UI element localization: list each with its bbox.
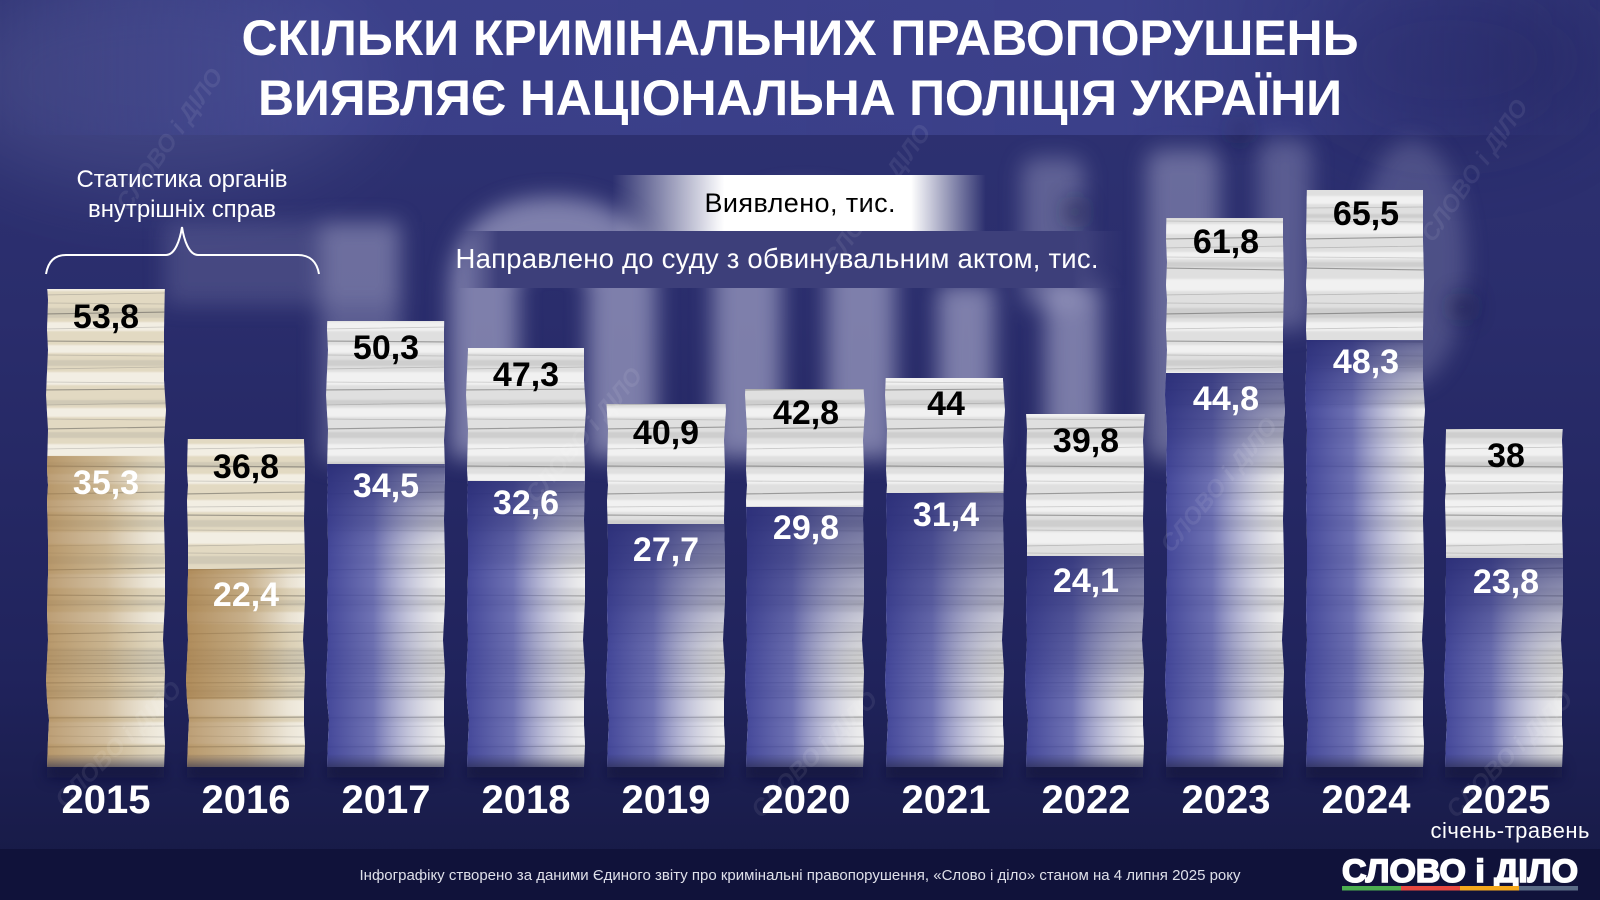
annotation: statistics of internal affairs bodies: внутрішніх справ <box>88 196 276 223</box>
bar: 2024: 48,3 <box>1333 343 1399 381</box>
bar: 2017 <box>326 321 446 814</box>
watermarks: СЛОВО і ДІЛО <box>819 119 937 272</box>
bar: 2017: 2017 <box>342 778 430 822</box>
bar: 2015: 53,8 <box>73 298 139 336</box>
bar: 2024: 65,5 <box>1333 195 1399 233</box>
bar: 2023: 61,8 <box>1193 223 1259 261</box>
legend: Виявлено, тис. <box>704 188 896 218</box>
period note for 2025: січень-травень <box>1430 818 1590 843</box>
bar: 2020: 2020 <box>762 778 850 822</box>
bar: 2020: 29,8 <box>773 509 839 547</box>
bar: 2016 <box>186 439 305 814</box>
bar: 2021: 44 <box>927 385 965 423</box>
title: ВИЯВЛЯЄ НАЦІОНАЛЬНА ПОЛІЦІЯ УКРАЇНИ <box>258 70 1342 126</box>
bar: 2020 <box>745 389 865 814</box>
legend: Направлено до суду з обвинувальним актом, тис. <box>456 243 1098 274</box>
watermarks: СЛОВО і ДІЛО <box>111 63 229 216</box>
bar: 2024 <box>1303 180 1426 822</box>
watermarks: СЛОВО і ДІЛО <box>520 362 648 508</box>
bar: 2019: 2019 <box>622 778 710 822</box>
bar: 2025: 38 <box>1487 437 1525 475</box>
bar: 2022: 24,1 <box>1053 562 1119 600</box>
bar: 2015: 2015 <box>62 778 150 822</box>
watermarks: СЛОВО і ДІЛО <box>746 686 884 823</box>
bar: 2016: 36,8 <box>213 448 279 486</box>
title: СКІЛЬКИ КРИМІНАЛЬНИХ ПРАВОПОРУШЕНЬ <box>242 10 1358 66</box>
bar: 2024: 2024 <box>1322 778 1411 822</box>
bar: 2017: 50,3 <box>353 329 419 367</box>
bar: 2020: 42,8 <box>773 394 839 432</box>
bar shadows <box>47 764 1562 778</box>
bar: 2023: 2023 <box>1182 778 1270 822</box>
bar: 2023 <box>1163 180 1286 822</box>
bar: 2015: 35,3 <box>73 464 139 502</box>
bar: 2018: 32,6 <box>493 484 559 522</box>
bar: 2025: 2025 <box>1462 778 1550 822</box>
watermarks: СЛОВО і ДІЛО <box>1155 412 1283 558</box>
logo: Слово і Діло: СЛОВО і ДІЛО <box>1342 853 1578 889</box>
bar: 2018 <box>466 348 586 814</box>
bar: 2021 <box>885 378 1005 814</box>
bar: 2019: 40,9 <box>633 414 699 452</box>
bar: 2016: 22,4 <box>213 576 279 614</box>
bar: 2022 <box>1025 414 1145 814</box>
bar: 2019: 27,7 <box>633 531 699 569</box>
bar: 2015 <box>46 289 166 814</box>
legend <box>456 175 1126 288</box>
title <box>242 10 1358 126</box>
bar: 2018: 47,3 <box>493 356 559 394</box>
footer source note: Інфографіку створено за даними Єдиного звіту про кримінальні правопорушення, «Слово і діло» станом на 4 липня 2025 року <box>360 867 1241 884</box>
annotation: statistics of internal affairs bodies: Статистика органів <box>76 166 288 193</box>
annotation: statistics of internal affairs bodies <box>46 166 319 274</box>
bar: 2025 <box>1444 429 1563 814</box>
bar: 2017: 34,5 <box>353 467 419 505</box>
watermarks: СЛОВО і ДІЛО <box>1416 94 1534 247</box>
bar: 2022: 2022 <box>1042 778 1130 822</box>
bar: 2019 <box>606 404 726 814</box>
bar: 2021: 31,4 <box>913 496 979 534</box>
bar: 2022: 39,8 <box>1053 422 1119 460</box>
watermarks: СЛОВО і ДІЛО <box>50 676 188 813</box>
bar: 2025: 23,8 <box>1473 563 1539 601</box>
bar: 2021: 2021 <box>902 778 990 822</box>
bar: 2018: 2018 <box>482 778 570 822</box>
bar: 2016: 2016 <box>202 778 290 822</box>
watermarks: СЛОВО і ДІЛО <box>1441 686 1579 823</box>
bar: 2023: 44,8 <box>1193 380 1259 418</box>
